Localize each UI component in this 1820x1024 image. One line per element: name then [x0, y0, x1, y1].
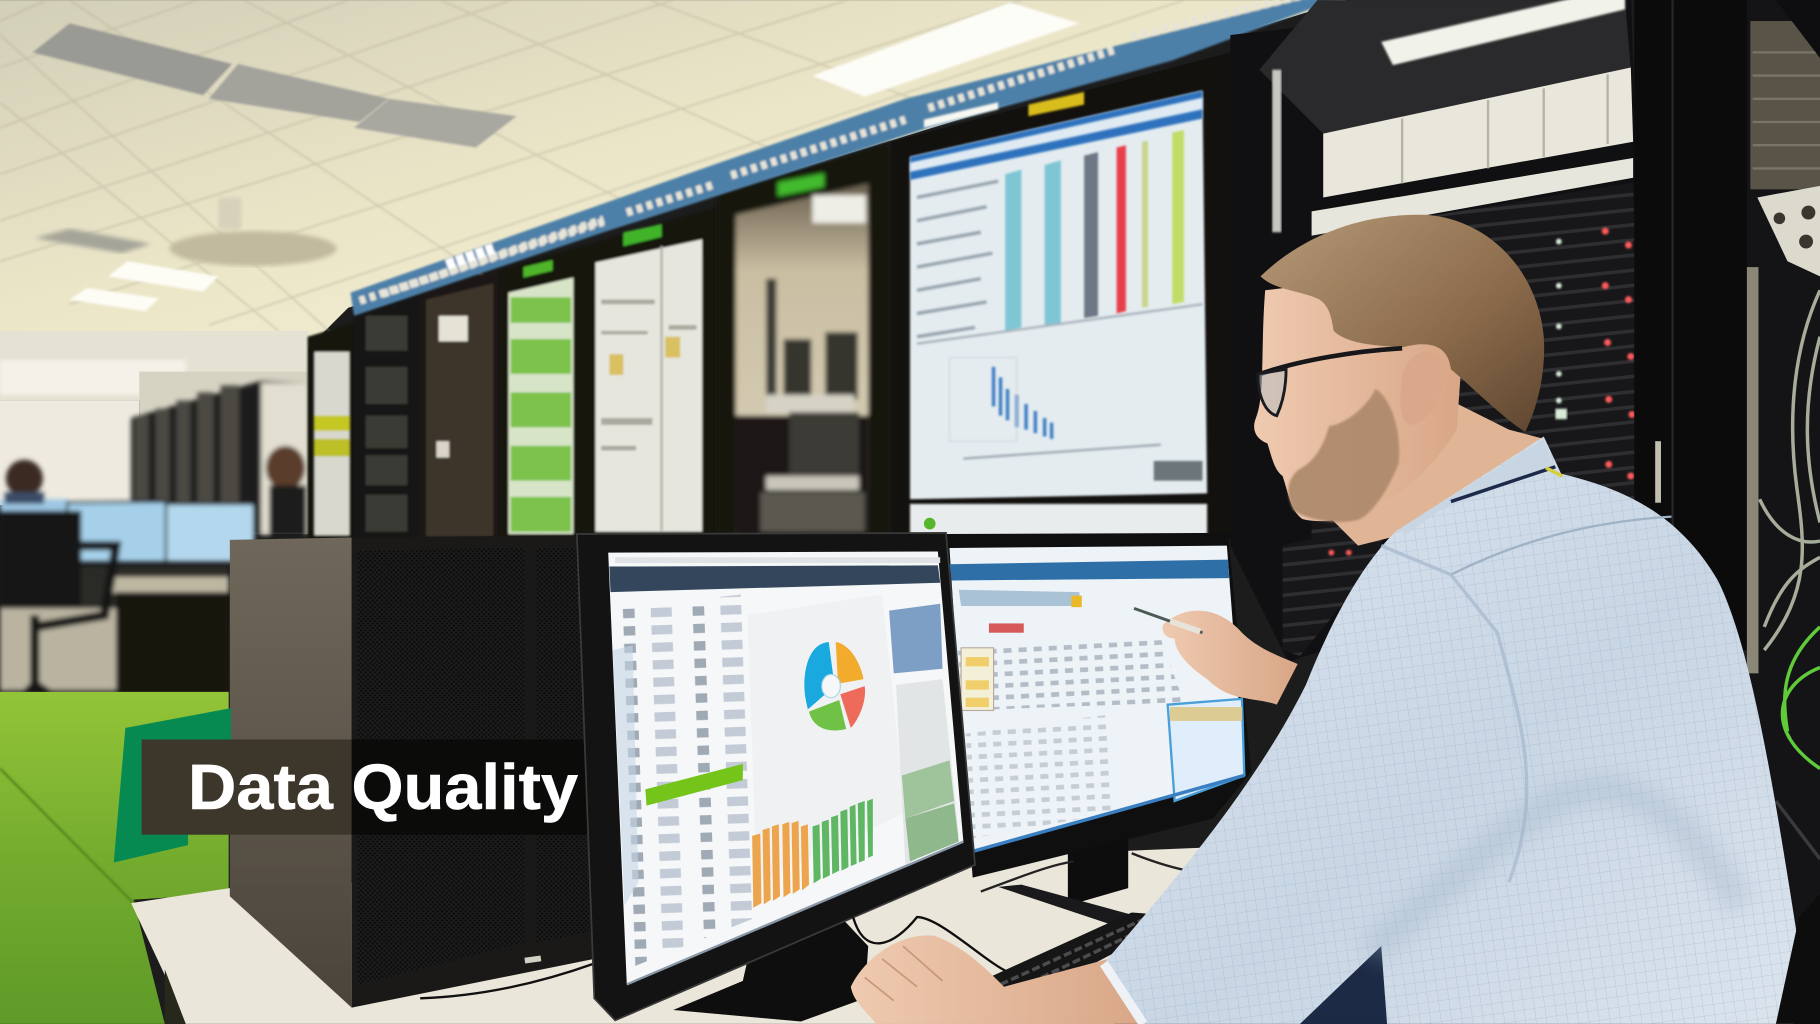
rack 7 structure — [891, 52, 1230, 539]
cables and keyboard — [853, 853, 1201, 998]
title band — [142, 740, 611, 835]
white desk — [131, 847, 1207, 1024]
server tower with mesh front — [230, 535, 594, 1008]
lanyard — [1451, 467, 1555, 502]
monitor stand — [1068, 838, 1128, 905]
green floor — [0, 692, 229, 1024]
rack 7 spreadsheet wall monitor — [910, 91, 1207, 536]
right open rack with cables — [1747, 0, 1820, 1024]
forearm and hand on keyboard — [851, 935, 1149, 1024]
neck — [1312, 395, 1544, 546]
bar chart — [752, 799, 873, 908]
pointing hand with pen — [1134, 608, 1298, 705]
green highlight bar — [645, 764, 743, 806]
rack 2 modules — [354, 293, 420, 539]
blue top rail with patch ports — [351, 0, 1335, 316]
black rack post with handle — [1634, 0, 1748, 650]
pie chart — [804, 642, 865, 730]
rack 8 with servers and status LEDs — [1230, 0, 1648, 662]
foreground dark corner — [1776, 894, 1820, 1024]
second monitor — [946, 533, 1251, 929]
head — [1254, 215, 1544, 522]
monitor stand — [673, 905, 868, 1022]
far room: racks, monitors, people, desk — [0, 381, 308, 710]
trousers — [1277, 946, 1393, 1024]
rack 6 glass door — [717, 142, 891, 539]
rack 4 green screen — [499, 246, 584, 539]
main monitor with dashboard — [577, 533, 975, 1022]
shirt — [1104, 437, 1801, 1024]
rack 5 document screen — [584, 207, 717, 539]
title accent shape — [114, 708, 231, 863]
ceiling grey panels and lights — [32, 2, 1079, 311]
rack 1 with screen — [308, 323, 354, 539]
rack 3 door — [420, 269, 499, 539]
title: Data Quality — [188, 751, 579, 823]
person — [851, 215, 1801, 1024]
glasses — [1261, 348, 1402, 374]
